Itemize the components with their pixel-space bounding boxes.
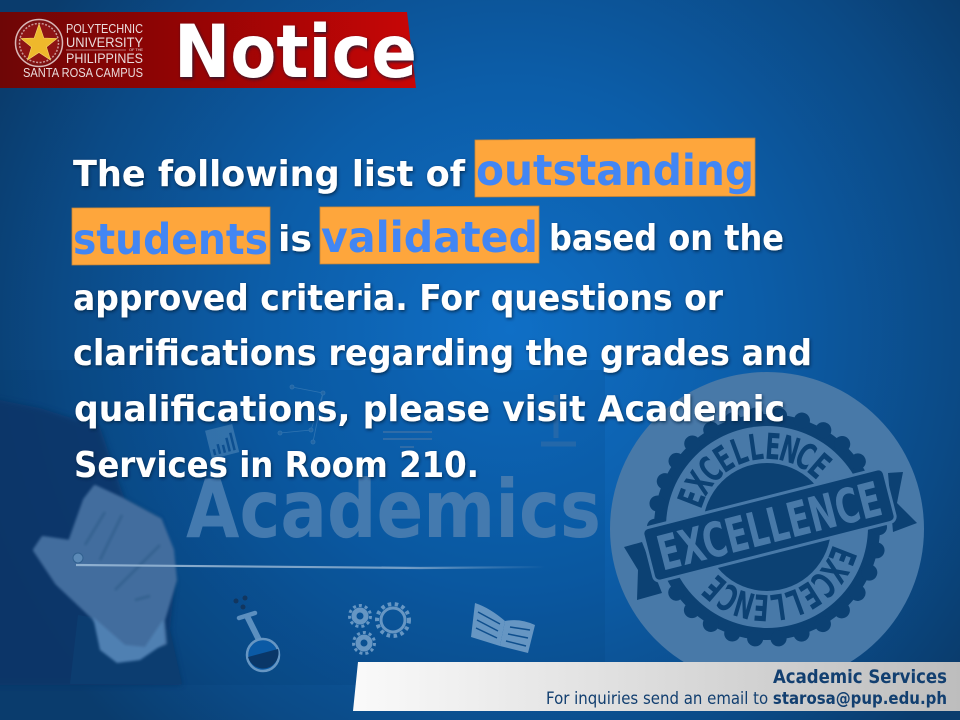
lower curved text: L — [780, 579, 808, 624]
ribbon tails — [624, 542, 662, 600]
university name: PHILIPPINES — [66, 50, 143, 66]
lower curved text: C — [802, 563, 843, 604]
paragraph text — [73, 154, 812, 486]
lower curved text: E — [792, 572, 827, 616]
upper curved text — [670, 426, 838, 513]
icon: faint network — [278, 385, 325, 444]
footer contact: For inquiries send an email to starosa@pup.edu.ph — [546, 689, 947, 708]
paragraph text: is — [278, 219, 312, 260]
ribbon — [642, 468, 897, 585]
lower curved text: E — [752, 585, 770, 628]
paragraph text: The following list of — [73, 154, 465, 195]
paragraph text: qualifications, please visit Academic — [74, 389, 785, 430]
icon: gears — [350, 604, 409, 654]
icon: faint top-right marker — [541, 395, 576, 444]
title: Notice: Notice — [174, 10, 417, 95]
lower curved text: X — [811, 552, 856, 589]
university name: UNIVERSITY — [66, 34, 144, 50]
paragraph text: Services in Room 210. — [74, 445, 479, 486]
icon: flask — [234, 596, 279, 671]
university name — [23, 22, 144, 80]
footer bar — [353, 662, 960, 711]
highlight: outstanding: outstanding — [476, 146, 754, 196]
lower curved text — [696, 541, 864, 628]
upper curved text: L — [726, 430, 754, 475]
upper curved text: E — [799, 446, 838, 488]
paragraph text: approved criteria. For questions or — [73, 278, 723, 319]
lower curved text: E — [696, 566, 735, 608]
paragraph text: based on the — [549, 218, 784, 259]
lower curved text: E — [819, 541, 864, 570]
university name: SANTA ROSA CAMPUS — [23, 66, 143, 80]
upper curved text: C — [691, 450, 732, 491]
lower curved text: N — [730, 580, 759, 626]
upper curved text: E — [764, 426, 782, 469]
icon: open book — [471, 603, 535, 653]
upper curved text: L — [746, 427, 766, 470]
lower curved text: C — [712, 574, 746, 619]
header banner — [0, 10, 417, 95]
upper curved text: X — [678, 465, 723, 502]
upper curved text: E — [670, 484, 715, 513]
highlight: validated: validated — [321, 213, 538, 263]
icon: faint lines — [383, 432, 432, 447]
upper curved text: C — [788, 435, 822, 480]
upper curved text: N — [775, 428, 804, 474]
lower curved text: L — [768, 584, 788, 627]
panel: academics photo backdrop — [0, 370, 605, 685]
logo: university seal — [16, 20, 62, 66]
university name: POLYTECHNIC — [66, 22, 143, 36]
highlight: students: students — [73, 215, 268, 265]
badge: excellence seal — [610, 372, 924, 686]
main message — [72, 138, 812, 486]
photo: hand holding pen — [0, 398, 545, 685]
upper curved text: E — [707, 438, 742, 482]
paragraph text: clarifications regarding the grades and — [73, 333, 812, 374]
heading: Academics watermark: Academics — [186, 463, 601, 556]
university name: OF THE — [129, 47, 143, 52]
icon: chart document — [205, 424, 239, 459]
